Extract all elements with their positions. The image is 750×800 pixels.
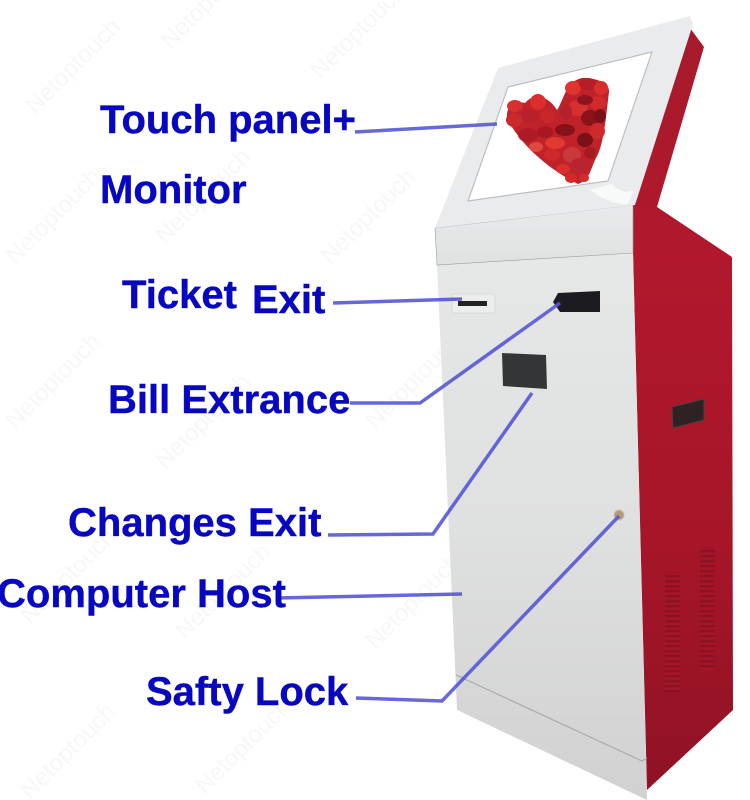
watermarks: Netoptouch <box>170 538 276 644</box>
watermarks <box>0 0 466 800</box>
label: changes exit: Changes Exit <box>68 501 321 545</box>
bill entrance <box>553 291 600 312</box>
watermarks: Netoptouch <box>315 163 421 269</box>
watermarks: Netoptouch <box>150 143 256 249</box>
leader lines <box>277 124 619 701</box>
watermarks: Netoptouch <box>190 693 296 799</box>
watermarks: Netoptouch <box>360 548 466 654</box>
base line <box>456 675 647 761</box>
label: safty lock: Safty Lock <box>146 670 349 714</box>
watermarks: Netoptouch <box>15 523 121 629</box>
side vents <box>665 547 715 693</box>
leader: touch panel <box>355 124 497 132</box>
kiosk <box>435 16 733 800</box>
watermarks: Netoptouch <box>360 328 466 434</box>
panel: head band <box>435 205 633 265</box>
changes exit <box>502 353 547 389</box>
side slot <box>672 399 704 428</box>
label: ticket: Ticket <box>122 273 237 317</box>
label: bill extrance: Bill Extrance <box>108 378 350 422</box>
leader: ticket exit <box>333 299 462 303</box>
watermarks: Netoptouch <box>0 163 106 269</box>
ticket exit slot <box>452 294 495 313</box>
panel: monitor frame <box>435 16 693 228</box>
leader: bill extrance <box>350 303 560 403</box>
watermarks: Netoptouch <box>0 328 106 434</box>
label: computer host: Computer Host <box>0 572 286 616</box>
panel: front body <box>437 253 647 800</box>
watermarks: Netoptouch <box>150 368 256 474</box>
screen <box>468 52 652 201</box>
image: heart of petals <box>506 78 609 184</box>
label: touch panel: Touch panel+ <box>100 98 356 142</box>
screen glare <box>590 184 634 204</box>
watermarks: Netoptouch <box>20 13 126 119</box>
panel: red side <box>633 28 733 790</box>
leader: changes exit <box>328 393 532 535</box>
label: monitor: Monitor <box>100 168 247 212</box>
leader: safty lock <box>356 516 619 701</box>
label: exit: Exit <box>252 278 325 322</box>
safety lock <box>614 510 624 520</box>
leader: computer host <box>277 594 462 598</box>
